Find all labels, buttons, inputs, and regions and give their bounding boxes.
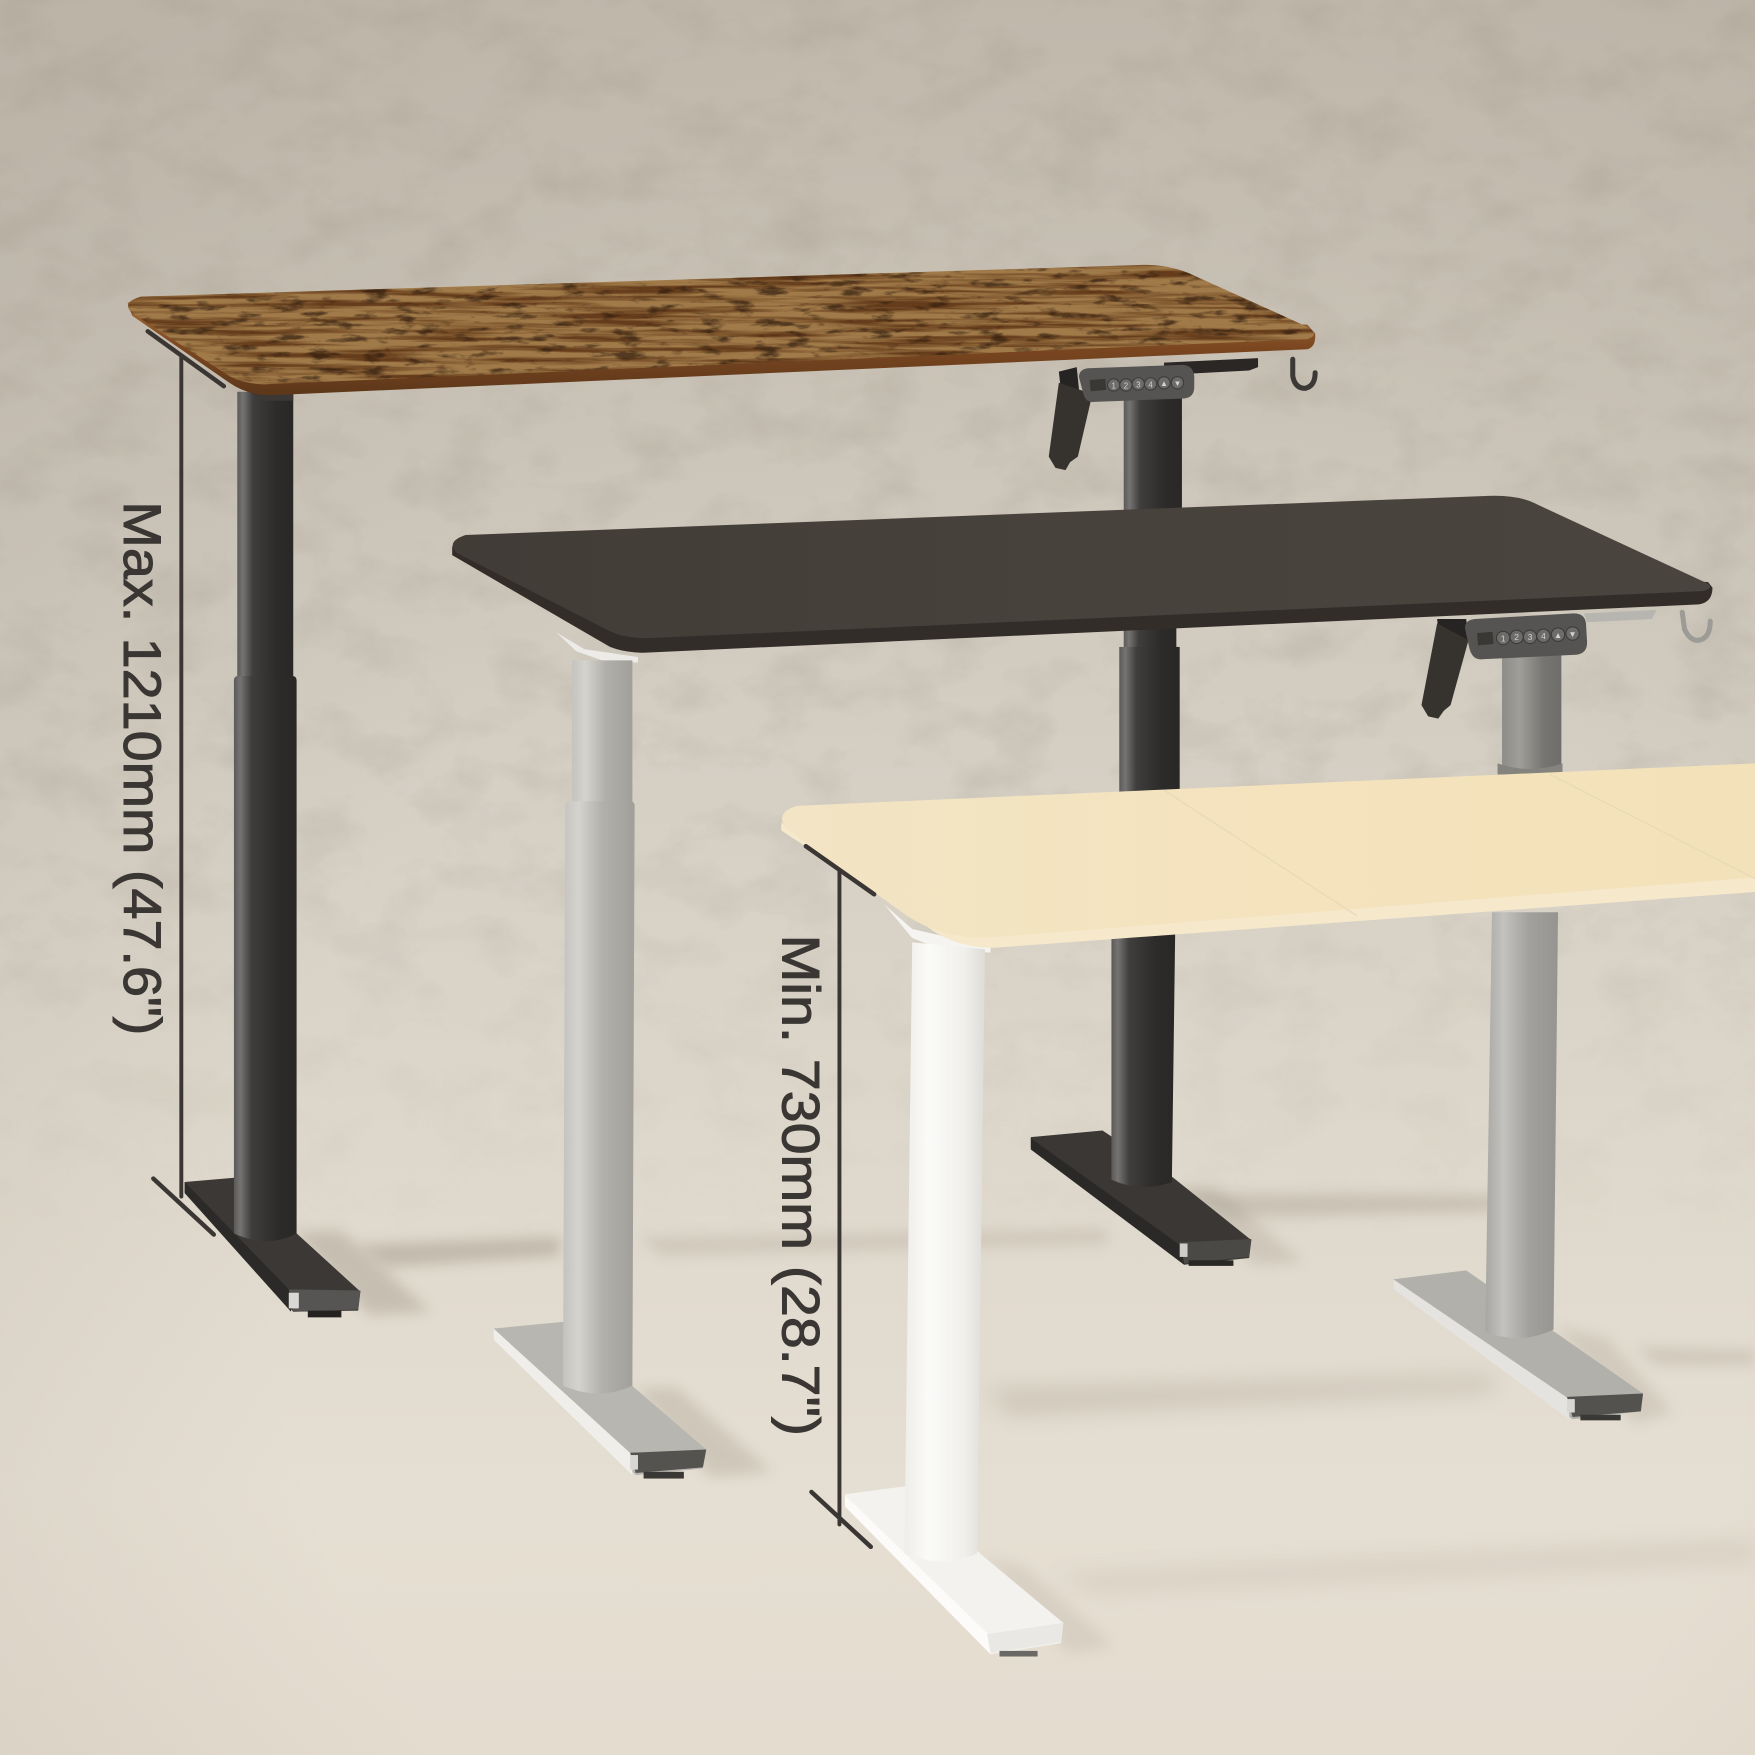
- back leg: gray frame: [1485, 655, 1562, 1338]
- front leg: [904, 942, 985, 1561]
- minimum height dimension: [770, 846, 874, 1547]
- front leg upper section: [572, 660, 632, 806]
- maple tabletop surface: [782, 763, 1755, 938]
- desk: black top with gray frame: [452, 496, 1712, 1479]
- control handle: [1421, 619, 1468, 719]
- keypad: 1: [1501, 633, 1506, 643]
- desk: rustic brown top with black frame: [112, 252, 1332, 1317]
- keypad: 2: [1514, 632, 1519, 642]
- front leg lower section: [563, 801, 635, 1393]
- white bracket below tabletop: [556, 632, 638, 663]
- tabletop seams: [1164, 775, 1755, 916]
- control handle: [1049, 367, 1092, 470]
- white bracket below tabletop: [884, 904, 991, 952]
- hook: [1682, 612, 1710, 640]
- back leg: black frame: [1111, 392, 1182, 1187]
- maximum height dimension: [112, 331, 224, 1235]
- keypad: ▼: [1174, 379, 1181, 388]
- tabletop surface with wood grain: [128, 264, 1314, 384]
- tabletop edge: [128, 302, 1315, 395]
- label: Max. 1210mm (47.6"): [112, 501, 171, 1035]
- keypad: ▲: [1554, 630, 1562, 640]
- foot of front leg: [845, 1486, 1063, 1657]
- hook: [1293, 359, 1315, 388]
- dark tabletop underside: [146, 319, 293, 401]
- maple tabletop edge: [781, 823, 1755, 948]
- keypad: [1079, 365, 1194, 402]
- keypad: 4: [1541, 631, 1546, 641]
- foot of front leg: [494, 1322, 706, 1479]
- keypad: 3: [1136, 380, 1141, 389]
- keypad: 3: [1528, 632, 1533, 642]
- front leg lower section: [234, 676, 297, 1241]
- label: Min. 730mm (28.7"): [770, 935, 829, 1436]
- dark tabletop surface: [453, 496, 1710, 638]
- dimension line: [806, 846, 874, 1547]
- front foot: [185, 1177, 360, 1317]
- keypad: 2: [1124, 381, 1128, 390]
- under-desk bracket: [1584, 610, 1657, 622]
- keypad: 4: [1148, 380, 1153, 389]
- floor shadows: [293, 1186, 1755, 1654]
- under-desk bracket: [1164, 358, 1258, 375]
- dark tabletop edge: [452, 546, 1712, 653]
- desk: maple top with white frame: [781, 763, 1755, 1657]
- keypad: [1465, 613, 1587, 659]
- keypad: ▼: [1568, 629, 1577, 639]
- back foot: black frame: [1031, 1130, 1251, 1266]
- keypad: 1: [1111, 381, 1116, 390]
- front leg upper section: [237, 392, 293, 681]
- keypad: ▲: [1160, 379, 1168, 388]
- dimension line: [148, 331, 224, 1235]
- back foot: gray frame: [1393, 1270, 1643, 1420]
